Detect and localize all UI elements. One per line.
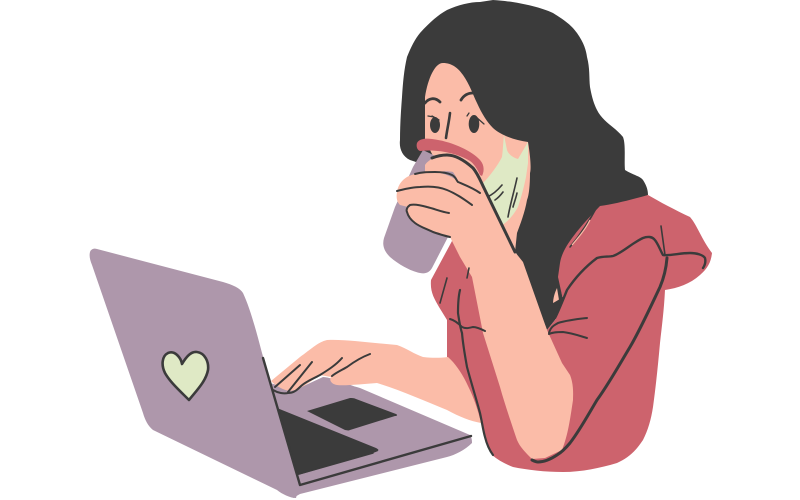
laptop screen panel: [277, 408, 378, 475]
face mask: [483, 135, 528, 225]
shirt: [431, 195, 712, 472]
cup gap between fingers: [437, 171, 458, 181]
right hand and upper arm holding cup: [397, 155, 573, 459]
laptop hinge and front edge lines: [263, 358, 471, 485]
laptop lid: [90, 249, 300, 498]
face and neck: [425, 63, 531, 252]
laptop base: [270, 377, 472, 498]
skin slit at neckline: [553, 288, 559, 304]
laptop trackpad: [307, 398, 397, 430]
left forearm and hand on keyboard: [271, 340, 481, 423]
cup lid: [417, 139, 484, 176]
shirt fold lines: [440, 205, 705, 462]
icon: heart sticker: [163, 352, 208, 400]
eyes, eyebrows and nose: [425, 93, 484, 138]
hair: [400, 0, 648, 330]
cup body: [383, 150, 460, 273]
